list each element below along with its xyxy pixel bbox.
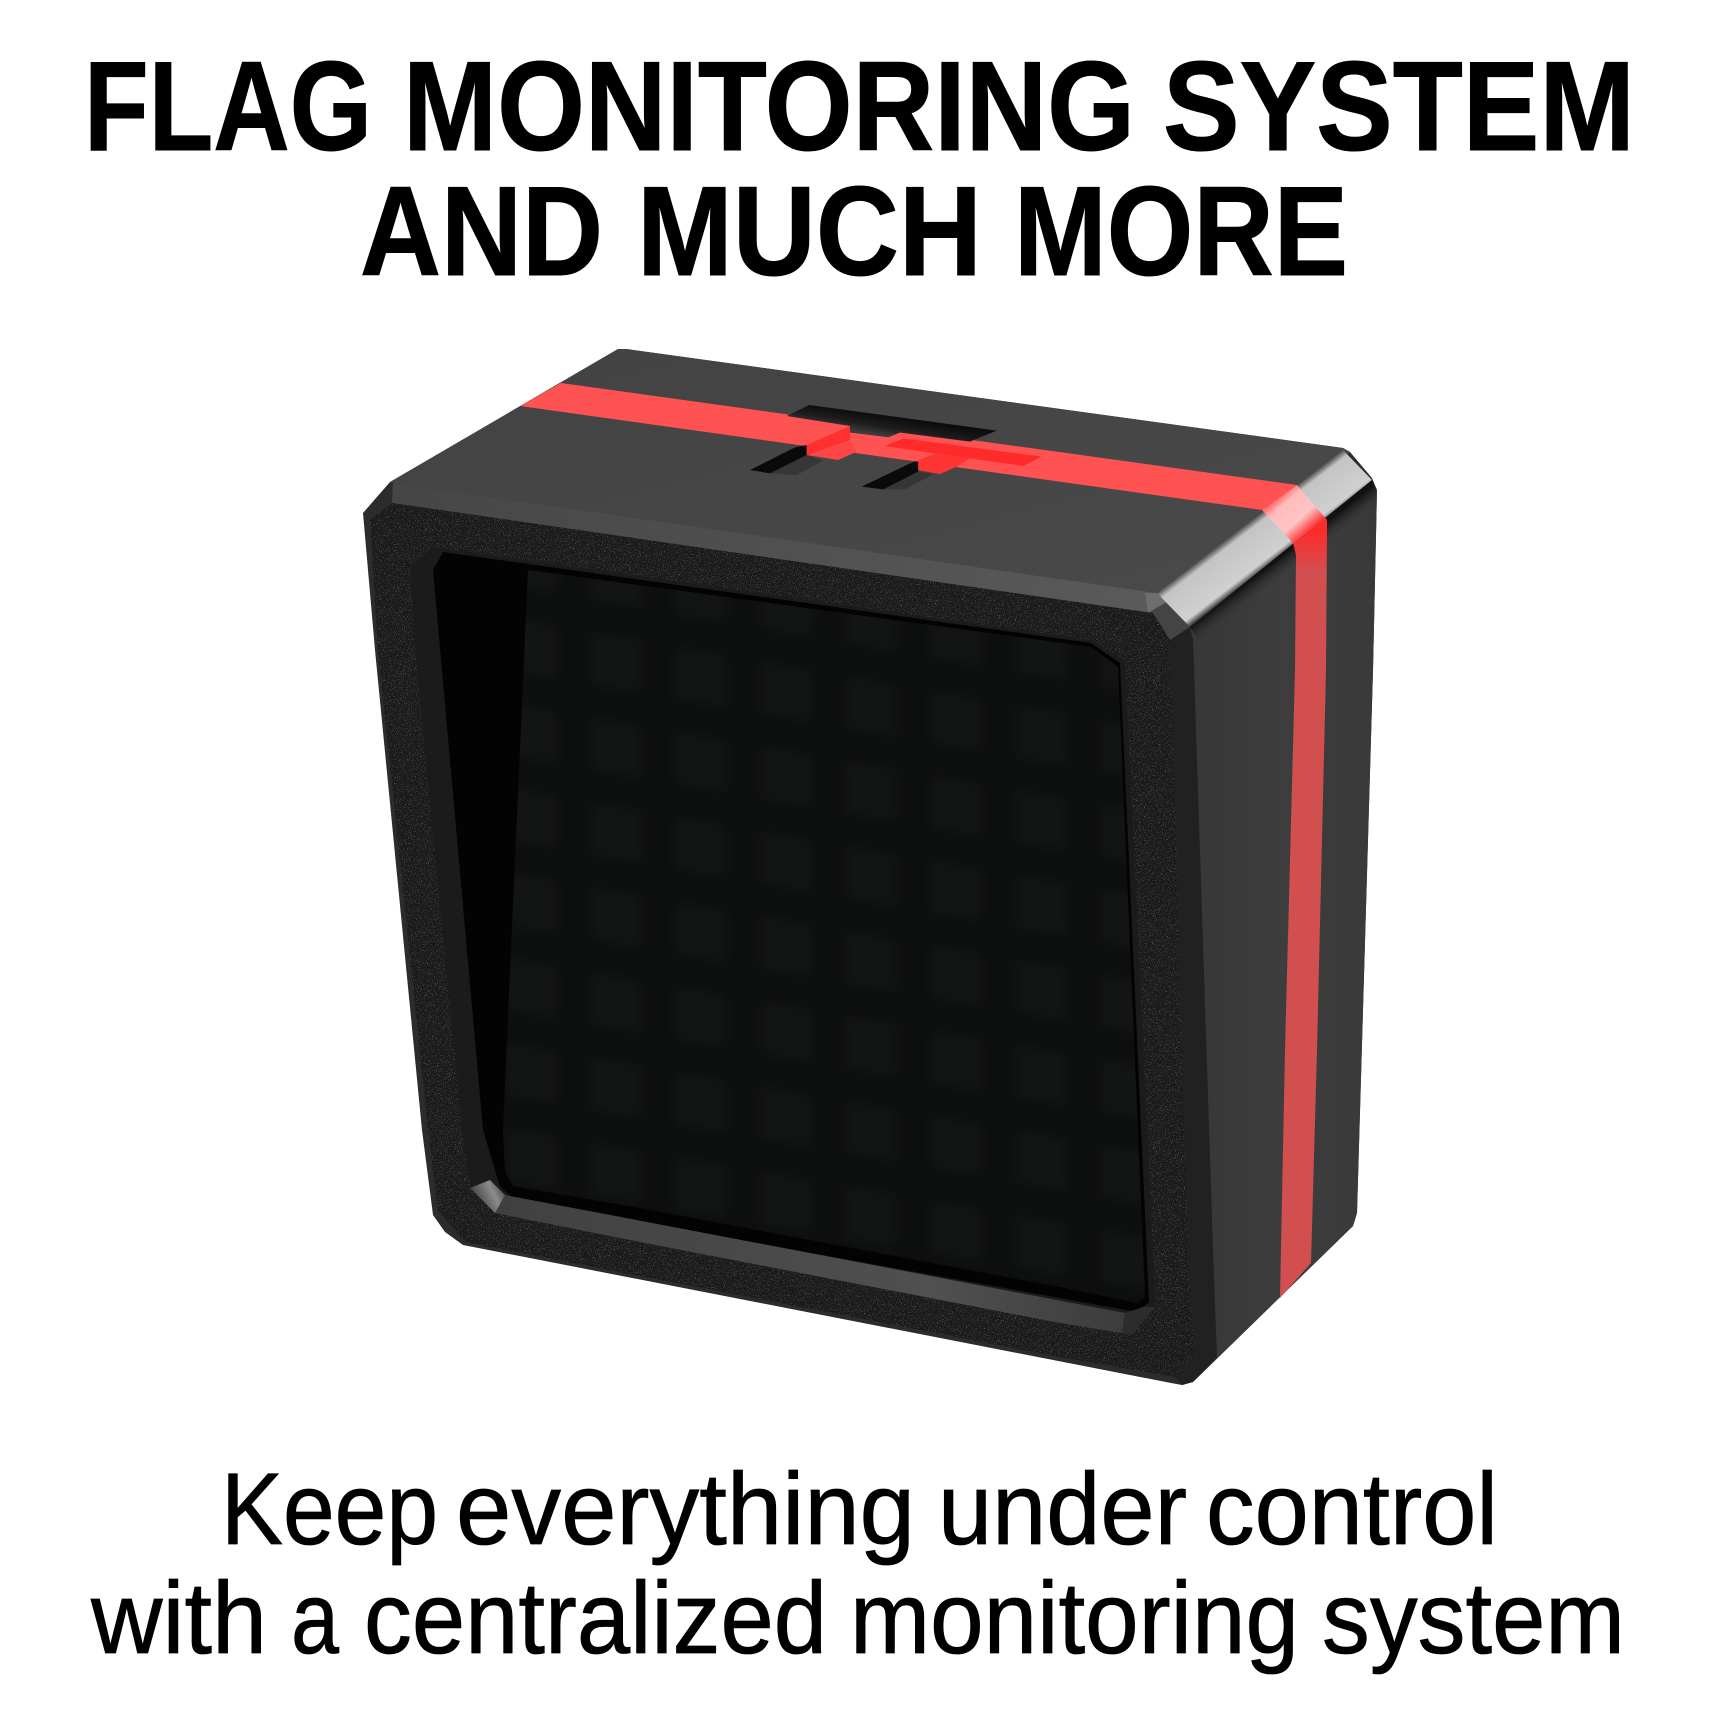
subtitle: everything [456, 1452, 915, 1566]
subtitle: with [90, 1561, 267, 1675]
red stripe on top [520, 383, 1297, 510]
lower inner bevel [495, 1195, 1125, 1333]
subtitle: control [1206, 1452, 1498, 1566]
subtitle: monitoring [850, 1561, 1299, 1675]
left slot fade [770, 455, 823, 475]
left slot [750, 445, 807, 473]
LED grid [470, 530, 1190, 1350]
title [84, 35, 1635, 302]
right slot fade [883, 472, 933, 489]
title: SYSTEM [1163, 35, 1635, 177]
inner frame band [410, 547, 1155, 1335]
red left block lower [807, 440, 857, 460]
red T stem [918, 453, 970, 474]
title: MONITORING [403, 35, 1135, 177]
light chamfer [1157, 450, 1372, 627]
right slot [862, 460, 918, 489]
red left block [807, 426, 850, 455]
title: AND [360, 160, 603, 302]
front top bevel [392, 483, 1157, 613]
red stripe on side [1280, 520, 1327, 1298]
subtitle: Keep [221, 1452, 438, 1566]
subtitle [90, 1452, 1625, 1675]
foam front frame [370, 503, 1195, 1377]
title: MUCH [637, 160, 982, 302]
back slot [787, 405, 997, 442]
title: MORE [1014, 160, 1348, 302]
shadow under chamfer [1190, 480, 1376, 650]
subtitle: a [291, 1561, 339, 1675]
corner highlight [470, 1180, 505, 1213]
opening interior [433, 552, 1149, 1312]
device silhouette [363, 349, 1377, 1385]
red stripe on chamfer [1262, 485, 1327, 543]
device: flag monitoring box [363, 349, 1377, 1385]
corner facet upper [1145, 593, 1167, 613]
title: FLAG [84, 35, 372, 177]
dark front edge of side [1170, 627, 1217, 1385]
top face [390, 349, 1350, 593]
corner facet lower [1148, 602, 1190, 640]
subtitle: centralized [364, 1561, 827, 1675]
red centre link [850, 433, 973, 474]
right side face [1190, 480, 1377, 1382]
subtitle: under [938, 1452, 1187, 1566]
subtitle: system [1322, 1561, 1625, 1675]
red T bar [885, 438, 1042, 466]
T-shaped slot logo [750, 405, 1042, 489]
screen [503, 570, 1145, 1303]
right lower facet [1122, 1307, 1155, 1335]
